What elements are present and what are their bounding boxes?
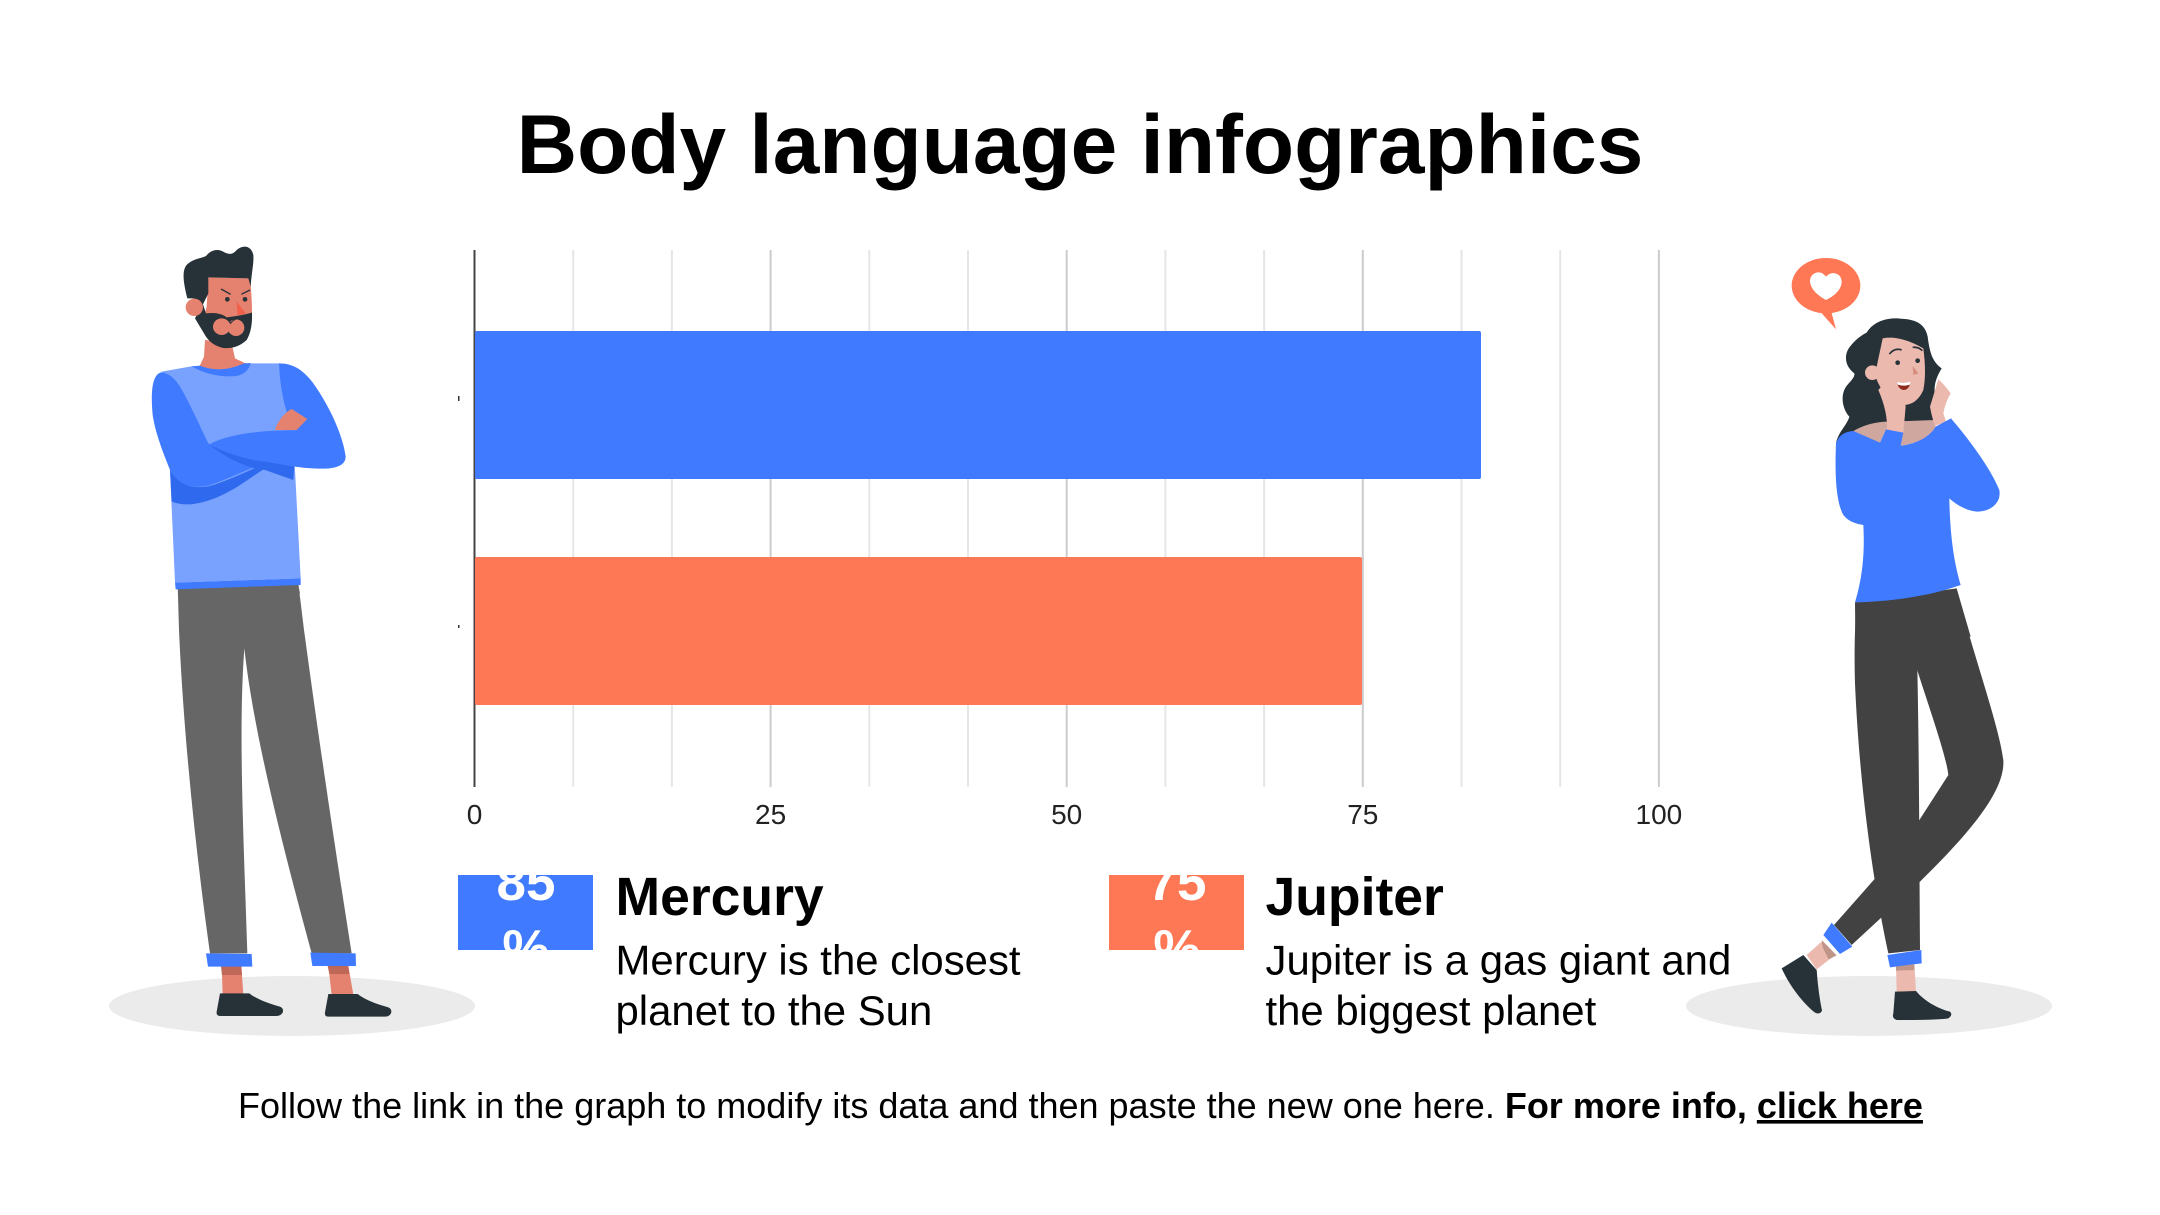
- text: Jupiter description: [1266, 936, 1731, 1034]
- percent badge: 85%: %: [502, 920, 550, 979]
- figure: woman with heart speech bubble: [1686, 258, 2052, 1036]
- axis labels: 0: [467, 799, 482, 830]
- icon: heart speech bubble: [1792, 258, 1860, 329]
- percent badge: 75%: [1109, 875, 1244, 950]
- title: Body language infographics: [517, 97, 1643, 191]
- axis labels: 100: [1636, 799, 1682, 830]
- heading: Jupiter: Jupiter: [1266, 868, 1444, 927]
- axis labels: 75: [1347, 799, 1378, 830]
- man lower body: [178, 583, 391, 1017]
- text: Jupiter description: the biggest planet: [1266, 987, 1597, 1034]
- footer note: Follow the link in the graph to modify its data and then paste the new one here. For more info, click here: [238, 1085, 1923, 1126]
- bar: Mercury 85: [475, 331, 1481, 479]
- percent badge: 75%: %: [1153, 920, 1201, 979]
- panel: Mercury legend: [458, 875, 1020, 1034]
- percent badge: 85%: 85: [497, 853, 555, 912]
- axis labels: [467, 799, 1682, 830]
- percent badge: 75%: 75: [1148, 853, 1206, 912]
- heading: Mercury: Mercury: [616, 868, 824, 927]
- floor shadow: [109, 976, 475, 1036]
- text: Mercury description: Mercury is the closest: [616, 936, 1021, 984]
- text: Mercury description: [616, 936, 1021, 1034]
- figure: man with crossed arms: [109, 247, 475, 1036]
- bar chart: [458, 250, 1682, 830]
- bar: Jupiter 75: [475, 557, 1362, 705]
- percent badge: 85%: [458, 875, 593, 950]
- woman legs: [1782, 600, 2003, 1020]
- text: Jupiter description: Jupiter is a gas giant and: [1266, 936, 1731, 984]
- panel: Jupiter legend: [1109, 875, 1729, 1034]
- axis labels: 25: [755, 799, 786, 830]
- woman upper body: [1792, 258, 2000, 637]
- axis labels: 50: [1051, 799, 1082, 830]
- man upper body: [152, 247, 346, 593]
- floor shadow: [1686, 976, 2052, 1036]
- text: Mercury description: planet to the Sun: [616, 987, 932, 1034]
